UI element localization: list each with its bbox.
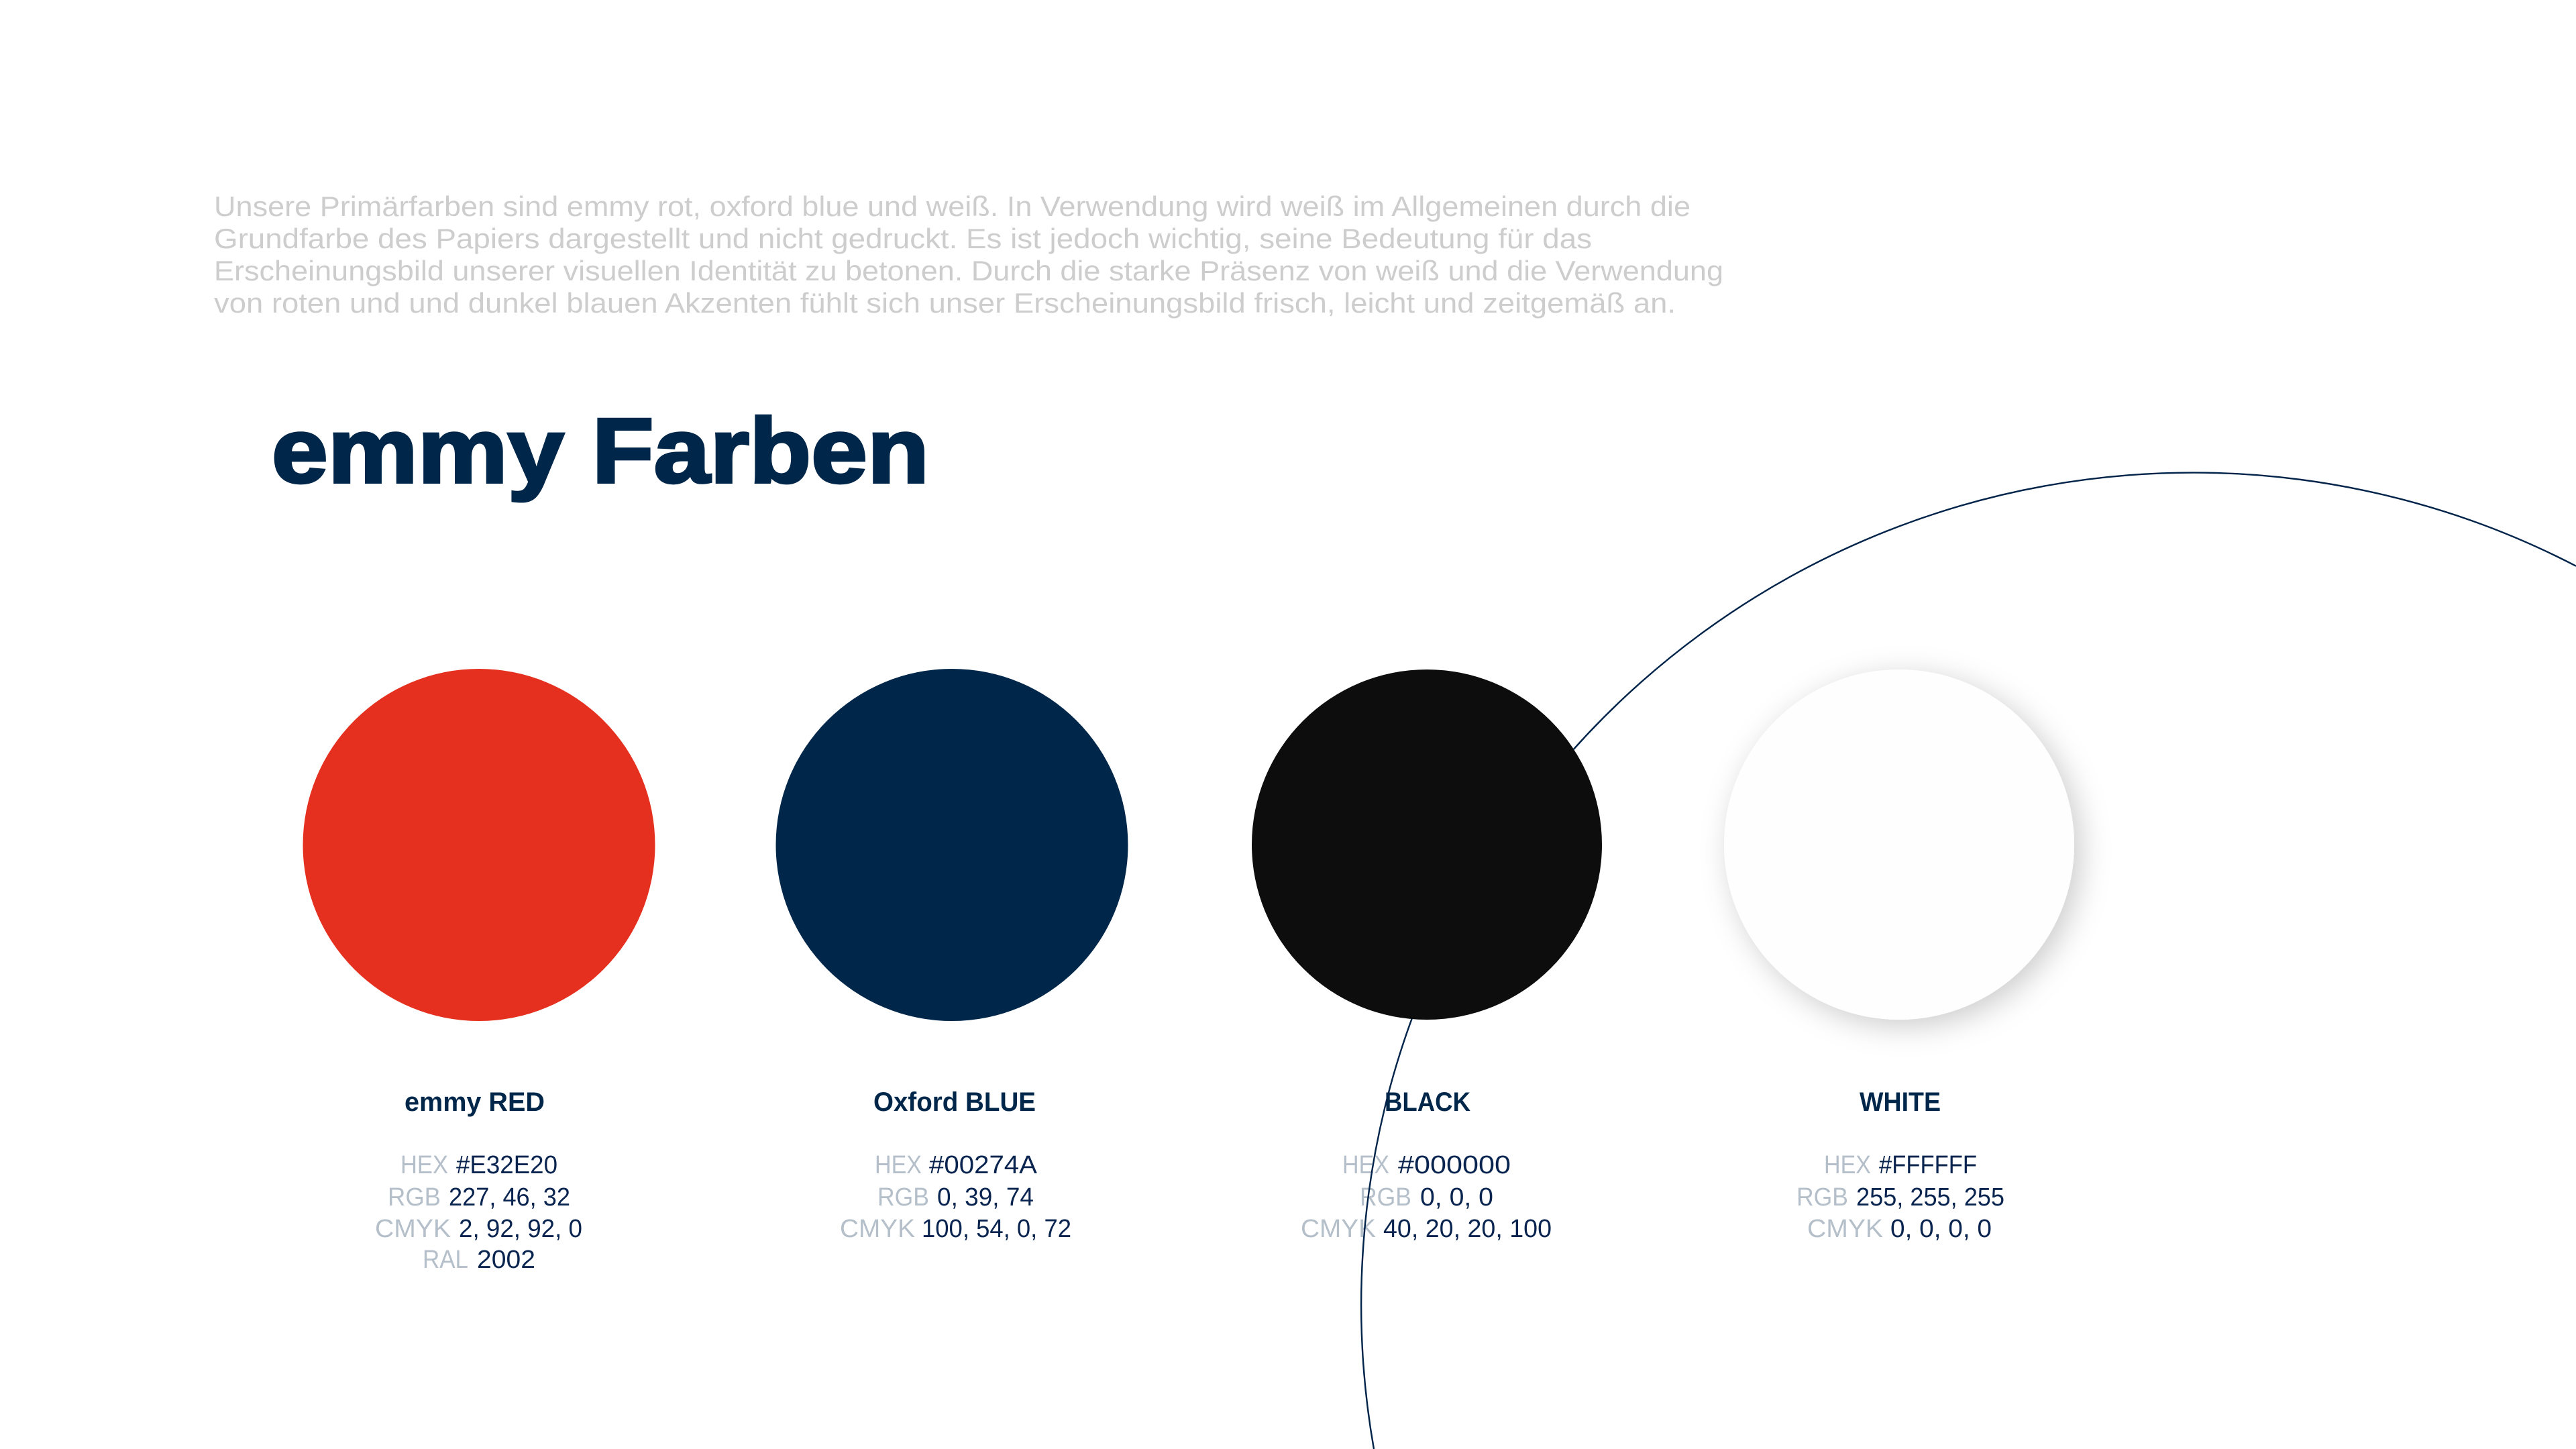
- color values: emmy red: 227, 46, 32: [449, 1183, 570, 1212]
- color values: white: CMYK: [1807, 1215, 1883, 1243]
- color values: oxford blue: [840, 1151, 1071, 1243]
- color values: emmy red: RGB: [388, 1183, 441, 1212]
- color values: black: 40, 20, 20, 100: [1383, 1215, 1552, 1243]
- color values: white: RGB: [1796, 1183, 1848, 1212]
- color values: emmy red: [375, 1151, 582, 1274]
- swatch: emmy red: [303, 669, 655, 1021]
- intro paragraph: Grundfarbe des Papiers dargestellt und nicht gedruckt. Es ist jedoch wichtig, seine Bedeutung für das: [214, 223, 1592, 254]
- intro paragraph: von roten und und dunkel blauen Akzenten fühlt sich unser Erscheinungsbild frisch, leicht und zeitgemäß an.: [214, 287, 1676, 319]
- color values: oxford blue: 100, 54, 0, 72: [922, 1215, 1071, 1243]
- panel: oxford blue text: [840, 1087, 1071, 1243]
- intro paragraph: Unsere Primärfarben sind emmy rot, oxford blue und weiß. In Verwendung wird weiß im Allgemeinen durch die: [214, 191, 1690, 222]
- large outline circle arc: [1361, 473, 2576, 1449]
- color values: black: CMYK: [1301, 1215, 1376, 1243]
- color values: black: RGB: [1360, 1183, 1411, 1212]
- color values: black: [1301, 1151, 1552, 1243]
- color values: oxford blue: #00274A: [929, 1151, 1038, 1179]
- color values: emmy red: #E32E20: [456, 1151, 557, 1179]
- title: emmy Farben: [272, 400, 929, 502]
- intro paragraph: Erscheinungsbild unserer visuellen Identität zu betonen. Durch die starke Präsenz von weiß und die Verwendung: [214, 255, 1723, 286]
- color values: emmy red: 2002: [477, 1246, 535, 1274]
- color values: oxford blue: HEX: [875, 1151, 922, 1179]
- color values: white: 255, 255, 255: [1856, 1183, 2004, 1212]
- color name: Oxford BLUE: Oxford BLUE: [873, 1087, 1036, 1117]
- panel: black text: [1301, 1087, 1552, 1243]
- swatch: oxford blue: [775, 669, 1128, 1021]
- color values: oxford blue: 0, 39, 74: [937, 1183, 1034, 1212]
- color values: emmy red: CMYK: [375, 1215, 451, 1243]
- color name: WHITE: WHITE: [1860, 1087, 1941, 1117]
- panel: emmy red text: [375, 1087, 582, 1274]
- color values: black: 0, 0, 0: [1420, 1183, 1493, 1212]
- color values: black: HEX: [1342, 1151, 1389, 1179]
- color name: BLACK: BLACK: [1385, 1087, 1470, 1117]
- color values: black: #000000: [1398, 1151, 1511, 1179]
- color values: emmy red: RAL: [423, 1246, 468, 1274]
- color values: white: HEX: [1824, 1151, 1871, 1179]
- intro paragraph: [214, 191, 1723, 319]
- color values: emmy red: HEX: [400, 1151, 448, 1179]
- swatch: white: [1724, 669, 2074, 1020]
- color values: white: #FFFFFF: [1879, 1151, 1977, 1179]
- swatch: black: [1252, 669, 1602, 1020]
- color values: oxford blue: RGB: [877, 1183, 929, 1212]
- color values: emmy red: 2, 92, 92, 0: [459, 1215, 582, 1243]
- panel: white text: [1796, 1087, 2004, 1243]
- color values: oxford blue: CMYK: [840, 1215, 915, 1243]
- color name: emmy RED: emmy RED: [405, 1087, 545, 1117]
- color values: white: 0, 0, 0, 0: [1890, 1215, 1992, 1243]
- color values: white: [1796, 1151, 2004, 1243]
